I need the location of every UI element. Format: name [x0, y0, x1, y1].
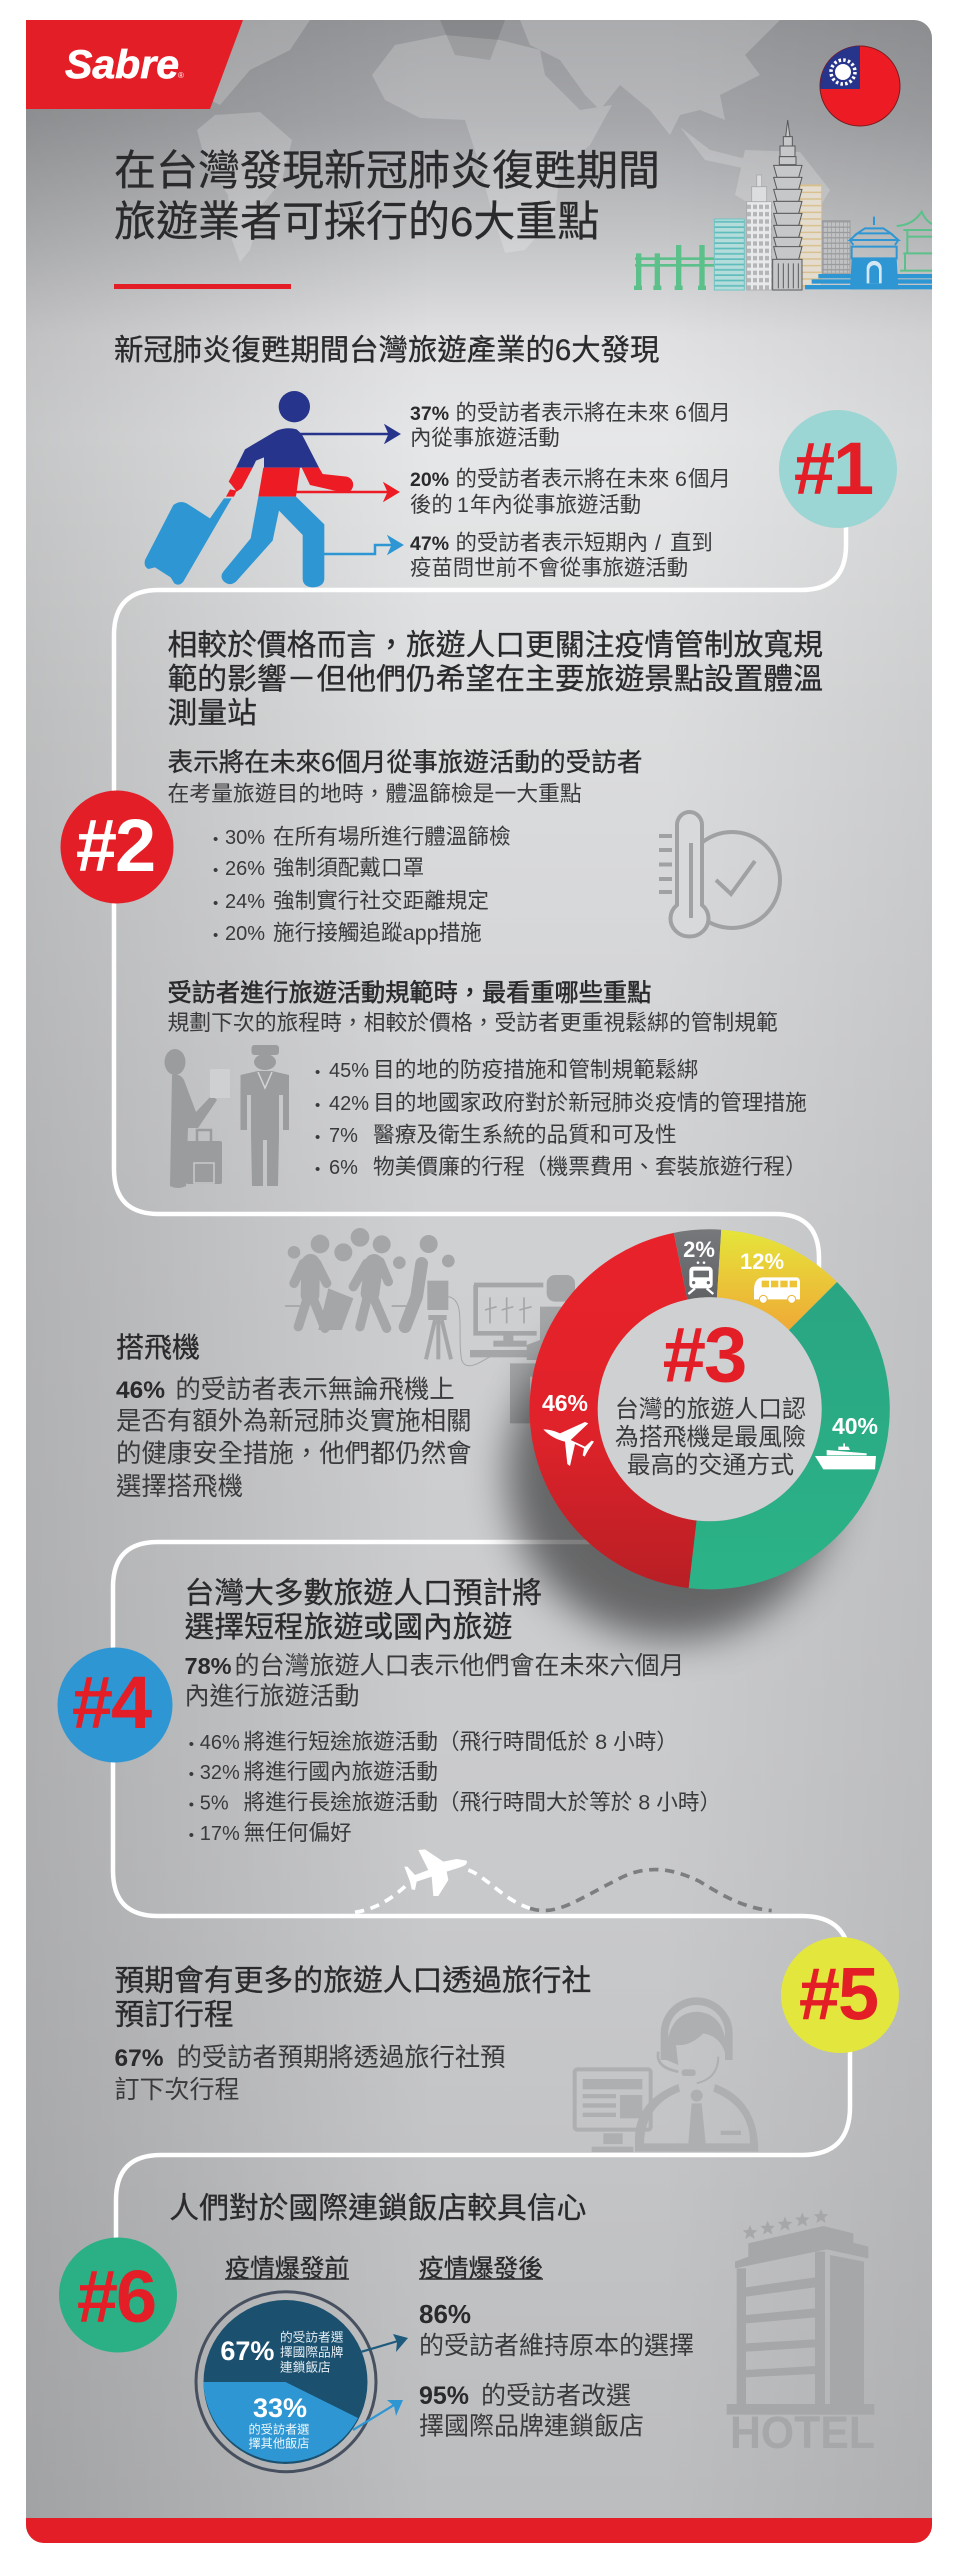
temperature screening block: •	[213, 927, 218, 944]
finding 4 text: •	[189, 1796, 194, 1814]
Sabre logo banner: Sabre	[65, 43, 179, 87]
after-pandemic results: 95%	[419, 2382, 469, 2410]
finding 1 stats: 年內從事旅遊活動	[470, 493, 641, 517]
badge #4: #4	[72, 1661, 152, 1744]
finding 3 text: 選擇搭飛機	[116, 1473, 243, 1501]
finding 3 text: 搭飛機	[116, 1332, 200, 1363]
after-pandemic results: 86%	[419, 2299, 471, 2329]
after-pandemic results: 的受訪者改選	[481, 2382, 631, 2410]
Sabre logo banner	[26, 20, 243, 109]
finding 1 stats: 的受訪者表示短期內	[456, 531, 648, 555]
pie chart: hotel preference: 33%	[253, 2393, 307, 2423]
subtitle: 新冠肺炎復甦期間台灣旅遊產業的6大發現	[114, 334, 659, 367]
finding 4 text: 5%	[200, 1792, 229, 1814]
donut labels: 40%	[832, 1413, 878, 1439]
finding 4 text: 將進行短途旅遊活動（飛行時間低於 8 小時）	[244, 1729, 678, 1754]
temperature screening block: 表示將在未來6個月從事旅遊活動的受訪者	[168, 748, 642, 777]
pie chart: hotel preference: 67%	[220, 2336, 274, 2366]
finding 4 text: 46%	[200, 1732, 240, 1754]
icon: traveler and officer	[164, 1045, 289, 1188]
finding 1 stats: 的受訪者表示將在未來	[456, 401, 669, 425]
finding 2 heading: 範的影響－但他們仍希望在主要旅遊景點設置體溫	[168, 663, 823, 696]
donut center caption: 最高的交通方式	[627, 1452, 794, 1479]
temperature screening block: •	[213, 895, 218, 912]
pie chart: hotel preference: 擇國際品牌	[280, 2344, 344, 2360]
finding 3 text	[116, 1332, 471, 1501]
temperature screening block: 24%	[225, 891, 265, 913]
Sabre logo banner: ®	[178, 71, 184, 80]
finding 2 heading: 相較於價格而言，旅遊人口更關注疫情管制放寬規	[168, 629, 823, 662]
finding 1 stats: 37%	[410, 403, 449, 425]
badge #6	[59, 2238, 177, 2352]
pie chart: hotel preference: 連鎖飯店	[280, 2360, 331, 2374]
finding 1 stats: 6	[675, 401, 687, 425]
after-pandemic results: 擇國際品牌連鎖飯店	[419, 2412, 644, 2440]
badge #2	[60, 790, 174, 904]
finding 2 heading: 測量站	[168, 697, 257, 730]
title	[114, 147, 660, 245]
temperature screening block: 施行接觸追蹤app措施	[273, 920, 482, 945]
finding 4 text: 將進行國內旅遊活動	[244, 1759, 438, 1784]
travel guidance block: •	[315, 1097, 320, 1114]
temperature screening block: 在考量旅遊目的地時，體溫篩檢是一大重點	[168, 781, 582, 806]
finding 5 text: 預訂行程	[114, 1998, 234, 2032]
pie chart: hotel preference: 擇其他飯店	[248, 2436, 309, 2450]
before and after column headings: 疫情爆發前	[225, 2255, 349, 2283]
finding 5 text: 的受訪者預期將透過旅行社預	[177, 2044, 505, 2072]
travel guidance block: •	[315, 1064, 320, 1081]
HOTEL label: HOTEL	[730, 2407, 875, 2458]
finding 2 heading	[168, 629, 823, 730]
finding 5 text: 預期會有更多的旅遊人口透過旅行社	[114, 1964, 591, 1998]
donut labels: 2%	[683, 1237, 715, 1262]
travel guidance block: 42%	[329, 1093, 369, 1115]
badge #1	[779, 410, 897, 528]
before and after column headings: 疫情爆發後	[419, 2255, 543, 2283]
finding 1 stats: 個月	[688, 467, 731, 491]
travel guidance block: 目的地國家政府對於新冠肺炎疫情的管理措施	[373, 1090, 807, 1115]
donut center caption: 台灣的旅遊人口認	[615, 1396, 806, 1423]
finding 5 text: 67%	[114, 2045, 164, 2072]
badge #5	[781, 1937, 899, 2053]
segment: plane 46%	[530, 1233, 697, 1588]
donut labels: 46%	[542, 1390, 588, 1416]
pie chart: hotel preference	[196, 2292, 376, 2472]
donut center caption: 為搭飛機是最風險	[615, 1424, 806, 1451]
segment: ship 40%	[689, 1282, 890, 1589]
finding 1 stats: 6	[675, 467, 687, 491]
finding 1 stats	[410, 401, 731, 580]
temperature screening block: 26%	[225, 858, 265, 880]
temperature screening block: 20%	[225, 923, 265, 945]
temperature screening block: 在所有場所進行體溫篩檢	[273, 824, 511, 849]
icon: Taiwan flag	[820, 46, 900, 126]
segment: bus 12%	[717, 1230, 837, 1330]
temperature screening block: 強制實行社交距離規定	[273, 888, 489, 913]
illustration: Taipei skyline	[634, 120, 935, 290]
finding 4 text	[184, 1577, 721, 1845]
finding 1 stats: /	[655, 531, 661, 555]
finding 1 stats: 47%	[410, 533, 449, 555]
donut center	[598, 1297, 822, 1521]
winding white route line	[113, 510, 850, 2250]
finding 1 stats: 直到	[670, 531, 713, 555]
finding 4 text: 將進行長途旅遊活動（飛行時間大於等於 8 小時）	[244, 1790, 721, 1814]
travel guidance block: 6%	[329, 1157, 358, 1179]
travel guidance block: 45%	[329, 1060, 369, 1082]
after-pandemic results	[419, 2299, 694, 2440]
finding 3 text: 的健康安全措施，他們都仍然會	[116, 1440, 471, 1468]
donut chart: perceived transport risk	[530, 1229, 890, 1589]
finding 3 text: 是否有額外為新冠肺炎實施相關	[116, 1408, 471, 1436]
after-pandemic results: 的受訪者維持原本的選擇	[419, 2332, 694, 2360]
finding 4 text: 內進行旅遊活動	[184, 1682, 360, 1710]
finding 4 text: 的台灣旅遊人口表示他們會在未來六個月	[234, 1652, 685, 1680]
icon: travel agent with headset	[575, 1997, 758, 2152]
finding 4 text: 32%	[200, 1762, 240, 1784]
temperature screening block: •	[213, 831, 218, 848]
travel guidance block: 7%	[329, 1125, 358, 1147]
badge #5: #5	[799, 1952, 878, 2036]
travel guidance block: 目的地的防疫措施和管制規範鬆綁	[373, 1057, 698, 1082]
finding 1 stats: 內從事旅遊活動	[410, 426, 560, 450]
finding 4 text: 78%	[184, 1653, 232, 1679]
finding 4 text: •	[189, 1827, 194, 1844]
travel guidance block	[168, 980, 807, 1179]
segment: train 2%	[674, 1229, 721, 1300]
finding 4 text: •	[189, 1766, 194, 1783]
finding 5 text: 訂下次行程	[114, 2076, 240, 2104]
badge #3: #3	[663, 1310, 745, 1398]
donut labels: 12%	[740, 1249, 784, 1274]
finding 3 text: 46%	[116, 1377, 165, 1404]
finding 1 stats: 1	[457, 493, 469, 517]
finding 4 text: 17%	[200, 1823, 240, 1845]
temperature screening block: 強制須配戴口罩	[273, 855, 424, 880]
icon: five-star hotel	[727, 2209, 874, 2415]
badge #1: #1	[794, 427, 873, 510]
red footer bar	[26, 2518, 932, 2543]
travel guidance block: 受訪者進行旅遊活動規範時，最看重哪些重點	[168, 980, 651, 1007]
badge #2: #2	[76, 804, 154, 887]
travel guidance block: •	[315, 1129, 320, 1146]
title: 在台灣發現新冠肺炎復甦期間	[114, 147, 660, 194]
finding 1 stats: 個月	[688, 401, 731, 425]
travel guidance block: 醫療及衛生系統的品質和可及性	[373, 1122, 677, 1147]
icon: passengers at thermal camera	[285, 1228, 587, 1423]
travel guidance block: 物美價廉的行程（機票費用、套裝旅遊行程）	[373, 1154, 807, 1179]
badge #4	[58, 1648, 172, 1762]
red accent rule	[114, 284, 291, 289]
temperature screening block	[168, 748, 642, 945]
donut labels	[542, 1237, 878, 1439]
finding 1 stats: 20%	[410, 469, 449, 491]
finding 5 text	[114, 1964, 591, 2104]
icon: plane with dashed flight path	[355, 1849, 772, 1912]
arrows: pie to results	[353, 2334, 408, 2430]
finding 4 text: •	[189, 1736, 194, 1753]
finding 1 stats: 疫苗問世前不會從事旅遊活動	[410, 556, 688, 580]
finding 6 heading: 人們對於國際連鎖飯店較具信心	[169, 2192, 586, 2225]
donut shadow	[507, 1310, 837, 1640]
title: 旅遊業者可採行的6大重點	[114, 198, 599, 245]
finding 4 text: 無任何偏好	[244, 1820, 352, 1845]
badge #6: #6	[77, 2255, 155, 2338]
arrows: traveler to stats	[295, 425, 403, 554]
finding 1 stats: 的受訪者表示將在未來	[456, 467, 669, 491]
travel guidance block: 規劃下次的旅程時，相較於價格，受訪者更重視鬆綁的管制規範	[168, 1010, 778, 1035]
temperature screening block: •	[213, 862, 218, 879]
icon: traveler figure	[145, 391, 353, 587]
donut center caption	[615, 1396, 806, 1479]
temperature screening block: 30%	[225, 827, 265, 849]
transport icons	[543, 1261, 876, 1469]
finding 1 stats: 後的	[410, 493, 453, 517]
before and after column headings	[225, 2255, 543, 2283]
finding 4 text: 台灣大多數旅遊人口預計將	[184, 1577, 542, 1610]
pie chart: hotel preference: 的受訪者選	[248, 2422, 309, 2436]
icon: thermometer with check	[659, 812, 780, 937]
pie chart: hotel preference: 的受訪者選	[280, 2330, 344, 2344]
finding 3 text: 的受訪者表示無論飛機上	[175, 1376, 455, 1404]
travel guidance block: •	[315, 1161, 320, 1178]
finding 4 text: 選擇短程旅遊或國內旅遊	[184, 1611, 512, 1644]
